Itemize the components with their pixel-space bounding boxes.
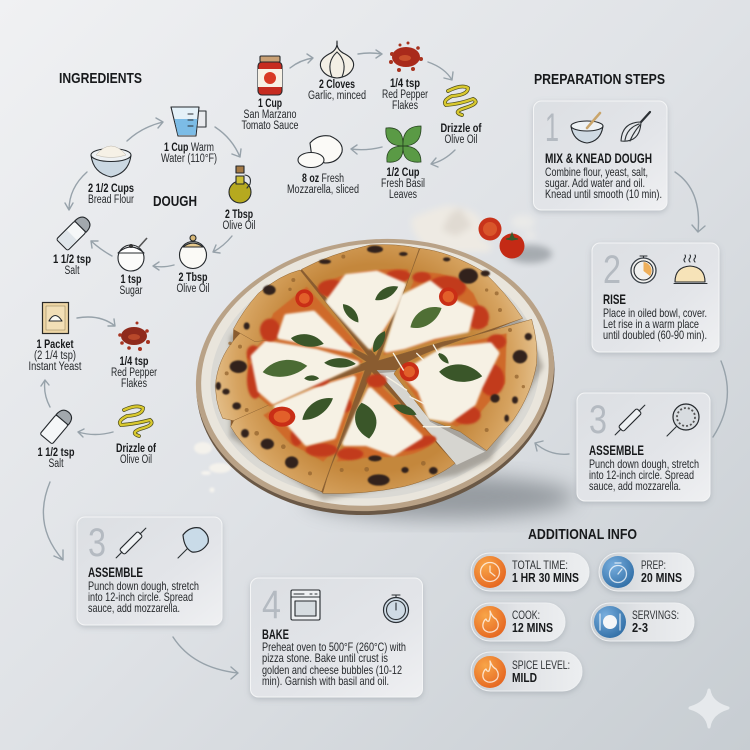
label: yeast: Instant Yeast bbox=[28, 361, 82, 373]
label: salt second: Salt bbox=[48, 458, 64, 470]
label: salt second: 1 1/2 tsp bbox=[38, 447, 74, 459]
label: drizzle: Drizzle of bbox=[440, 123, 482, 135]
ingredient: basil bbox=[386, 126, 421, 162]
label: sugar: Sugar bbox=[120, 285, 143, 297]
char spots on crust bbox=[216, 246, 532, 486]
label: mozzarella: 8 oz Fresh bbox=[302, 173, 344, 185]
label: olive oil: Olive Oil bbox=[222, 220, 256, 232]
sparkle mark bbox=[690, 690, 728, 727]
pill text: COOK: bbox=[512, 608, 540, 622]
arrow: water to oil bbox=[215, 127, 241, 157]
tomato slices bbox=[269, 287, 458, 427]
arrow: step 1 to step 2 bbox=[675, 172, 705, 232]
heading: ingredients: INGREDIENTS bbox=[59, 70, 142, 87]
cheese strings bbox=[387, 345, 450, 427]
label: yeast: 1 Packet bbox=[36, 339, 74, 351]
plate shadow bbox=[305, 475, 575, 519]
ingredient: sugar bbox=[118, 238, 147, 271]
basil leaves bbox=[261, 282, 483, 441]
panel: step 4 bake bbox=[250, 578, 422, 697]
arrow: assemble to pizza bbox=[535, 441, 569, 454]
ingredient: water bbox=[171, 107, 206, 136]
icon: covered dish bbox=[674, 255, 707, 284]
label: drizzle second bbox=[116, 443, 156, 466]
panel: step 3 assemble left bbox=[77, 517, 222, 625]
label: sugar bbox=[120, 274, 143, 297]
step body: Punch down dough, stretch bbox=[88, 579, 199, 593]
label: olive oil second: 2 Tbsp bbox=[178, 272, 208, 284]
icon: mixing bowl bbox=[571, 113, 603, 143]
ingredient: mozzarella bbox=[298, 136, 342, 168]
label: red pepper flakes: Red Pepper bbox=[382, 89, 428, 101]
step body: Place in oiled bowl, cover. bbox=[603, 306, 707, 320]
heading: dough: DOUGH bbox=[153, 193, 197, 210]
label: water: 1 Cup Warm bbox=[164, 142, 214, 154]
info pill: cook bbox=[471, 603, 565, 641]
label: mozzarella bbox=[287, 173, 359, 196]
pill text: PREP: bbox=[641, 558, 666, 572]
step body bbox=[545, 165, 662, 201]
step title: ASSEMBLE bbox=[88, 564, 143, 580]
step body: sauce, add mozzarella. bbox=[589, 479, 681, 493]
arrow: flour to water bbox=[127, 118, 163, 141]
label: tomato sauce bbox=[242, 98, 298, 132]
arrow: salt to step 3 bbox=[43, 482, 63, 560]
label: tomato sauce: San Marzano bbox=[244, 109, 296, 121]
arrow: yeast to flakes bbox=[77, 317, 115, 326]
flour scatter left of plate bbox=[194, 442, 231, 492]
step title: MIX & KNEAD DOUGH bbox=[545, 150, 652, 166]
arrow: basil to mozzarella bbox=[351, 145, 382, 154]
arrow: jar to sugar bbox=[153, 262, 174, 270]
ingredient: tomato sauce jar bbox=[258, 56, 282, 95]
step body bbox=[589, 457, 699, 493]
pill text bbox=[512, 658, 570, 685]
ingredient: olive oil bottle bbox=[229, 166, 251, 203]
label: basil: Fresh Basil bbox=[381, 178, 425, 190]
slice: left bbox=[216, 332, 367, 421]
cherry tomatoes bbox=[478, 218, 552, 263]
label: olive oil second: Olive Oil bbox=[176, 283, 210, 295]
ingredient: flakes second bbox=[118, 322, 150, 351]
icon: flame bbox=[474, 656, 506, 688]
arrow: garlic to flakes bbox=[358, 50, 382, 58]
info pill: total time bbox=[471, 553, 589, 591]
pill text bbox=[632, 608, 679, 635]
arrow: salt to packet bbox=[41, 380, 50, 407]
label: olive oil bbox=[222, 209, 256, 232]
arrow: step 3 to bake bbox=[173, 637, 238, 679]
ingredient: red pepper flakes bbox=[389, 42, 423, 72]
pill text: 2-3 bbox=[632, 620, 648, 635]
step number 4: 4 bbox=[262, 583, 281, 627]
pill text bbox=[512, 558, 579, 585]
pill text: 20 MINS bbox=[641, 570, 682, 585]
panel: step 3 assemble right bbox=[577, 393, 710, 501]
label: salt bbox=[53, 254, 91, 277]
step body: min). Garnish with basil and oil. bbox=[262, 674, 389, 688]
arrow: flour to salt bbox=[65, 172, 87, 210]
label: flour bbox=[88, 183, 134, 206]
label: flakes second bbox=[111, 356, 157, 390]
ingredient: flour bbox=[91, 146, 131, 177]
label: tomato sauce: Tomato Sauce bbox=[242, 120, 298, 132]
plate bbox=[180, 219, 570, 535]
pill text: 12 MINS bbox=[512, 620, 553, 635]
label: drizzle second: Olive Oil bbox=[120, 454, 152, 466]
plate visible in the pulled gap bbox=[377, 372, 485, 465]
panel: step 2 rise bbox=[592, 243, 719, 352]
slice: right pulled bbox=[394, 319, 537, 451]
icon: rolling pin bbox=[613, 403, 647, 437]
slice: bottom left bbox=[231, 370, 365, 492]
pizza on plate bbox=[180, 219, 570, 535]
label: olive oil second bbox=[176, 272, 210, 295]
label: water: Water (110°F) bbox=[161, 153, 217, 165]
arrow: tomato to garlic bbox=[290, 54, 313, 68]
ingredient: drizzle second bbox=[120, 406, 152, 436]
step body: sauce, add mozzarella. bbox=[88, 601, 180, 615]
step body: into 12-inch circle. Spread bbox=[589, 468, 694, 482]
ingredient: salt bbox=[56, 214, 93, 251]
label: yeast bbox=[28, 339, 82, 373]
arrow: sugar to salt bbox=[91, 241, 112, 256]
label: garlic bbox=[308, 79, 366, 102]
icon: rolling pin bbox=[114, 526, 148, 560]
info pill: servings bbox=[591, 603, 694, 641]
ingredient: salt second bbox=[40, 407, 75, 444]
label: mozzarella: Mozzarella, sliced bbox=[287, 184, 359, 196]
arrow: oil to jar bbox=[213, 236, 232, 253]
arrow: drizzle to basil bbox=[431, 150, 455, 167]
step body bbox=[262, 640, 406, 688]
crust mottling bbox=[225, 255, 525, 475]
slice: bottom bbox=[323, 372, 455, 494]
step title: ASSEMBLE bbox=[589, 442, 644, 458]
slice shadow bbox=[230, 252, 543, 500]
label: flakes second: Flakes bbox=[121, 378, 147, 390]
arrow: rise to assemble bbox=[713, 361, 727, 437]
label: yeast: (2 1/4 tsp) bbox=[34, 350, 76, 362]
info pill: prep bbox=[599, 553, 694, 591]
icon: pizza pan bbox=[667, 404, 699, 436]
label: basil: 1/2 Cup bbox=[386, 167, 420, 179]
label: tomato sauce: 1 Cup bbox=[258, 98, 282, 110]
pill text bbox=[512, 608, 553, 635]
ingredient: garlic bbox=[320, 41, 354, 78]
label: red pepper flakes bbox=[382, 78, 428, 112]
label: red pepper flakes: 1/4 tsp bbox=[390, 78, 420, 90]
icon: timer bbox=[631, 256, 656, 283]
label: olive oil: 2 Tbsp bbox=[225, 209, 253, 221]
pill text: SERVINGS: bbox=[632, 608, 679, 622]
label: flour: 2 1/2 Cups bbox=[88, 183, 134, 195]
step body: Preheat oven to 500°F (260°C) with bbox=[262, 640, 406, 654]
label: flour: Bread Flour bbox=[88, 194, 134, 206]
pill text: 1 HR 30 MINS bbox=[512, 570, 579, 585]
step body: Let rise in a warm place bbox=[603, 317, 699, 331]
label: salt: 1 1/2 tsp bbox=[53, 254, 91, 266]
heading: preparation steps: PREPARATION STEPS bbox=[534, 71, 665, 88]
step body: Punch down dough, stretch bbox=[589, 457, 699, 471]
step number 3: 3 bbox=[88, 521, 106, 565]
step number 2: 2 bbox=[603, 248, 621, 292]
icon: stopwatch bbox=[602, 556, 634, 588]
icon: stopwatch bbox=[384, 595, 408, 622]
step body: Combine flour, yeast, salt, bbox=[545, 165, 648, 179]
heading: additional info: ADDITIONAL INFO bbox=[528, 526, 637, 543]
label: basil: Leaves bbox=[389, 189, 417, 201]
slice: upper left bbox=[233, 270, 368, 356]
step body: pizza stone. Bake until crust is bbox=[262, 651, 388, 665]
label: drizzle: Olive Oil bbox=[444, 134, 478, 146]
label: salt: Salt bbox=[64, 265, 80, 277]
step body: sugar. Add water and oil. bbox=[545, 176, 645, 190]
step body: until doubled (60-90 min). bbox=[603, 328, 707, 342]
pill text: SPICE LEVEL: bbox=[512, 658, 570, 672]
slice: top right bbox=[378, 248, 523, 361]
pill text: MILD bbox=[512, 670, 537, 685]
label: drizzle bbox=[440, 123, 482, 146]
icon: flame bbox=[474, 606, 506, 638]
arrow: drizzle to salt bbox=[78, 429, 113, 437]
panel: step 1 mix and knead bbox=[534, 101, 667, 210]
ingredient: yeast packet bbox=[42, 302, 68, 334]
step body bbox=[603, 306, 707, 342]
step body: Knead until smooth (10 min). bbox=[545, 187, 662, 201]
ingredient: jar bbox=[180, 235, 206, 268]
label: salt second bbox=[38, 447, 74, 470]
step body bbox=[88, 579, 199, 615]
arrow: flakes to drizzle bbox=[428, 62, 453, 80]
step title: RISE bbox=[603, 291, 626, 307]
ingredient: olive oil drizzle bbox=[445, 87, 476, 115]
icon: whisk bbox=[621, 112, 650, 141]
label: water bbox=[161, 142, 217, 165]
slice: top centre bbox=[302, 245, 419, 356]
icon: pizza peel bbox=[178, 528, 208, 558]
icon: oven bbox=[291, 590, 320, 620]
icon: clock bbox=[474, 556, 506, 588]
pill text bbox=[641, 558, 682, 585]
label: basil bbox=[381, 167, 425, 201]
label: sugar: 1 tsp bbox=[120, 274, 142, 286]
flour pile near top of plate bbox=[411, 206, 536, 252]
step body: golden and cheese bubbles (10-12 bbox=[262, 663, 402, 677]
underlay closing the slice cuts bbox=[231, 248, 522, 493]
label: flakes second: 1/4 tsp bbox=[120, 356, 148, 368]
info pill: spice level bbox=[471, 652, 582, 691]
step title: BAKE bbox=[262, 626, 289, 642]
step body: into 12-inch circle. Spread bbox=[88, 590, 193, 604]
label: red pepper flakes: Flakes bbox=[392, 100, 418, 112]
step number 1: 1 bbox=[545, 106, 559, 150]
label: flakes second: Red Pepper bbox=[111, 367, 157, 379]
label: garlic: Garlic, minced bbox=[308, 90, 366, 102]
pill text: TOTAL TIME: bbox=[512, 558, 568, 572]
label: drizzle second: Drizzle of bbox=[116, 443, 156, 455]
step number 3: 3 bbox=[589, 398, 607, 442]
icon: plate and cutlery bbox=[594, 606, 626, 638]
label: garlic: 2 Cloves bbox=[319, 79, 355, 91]
